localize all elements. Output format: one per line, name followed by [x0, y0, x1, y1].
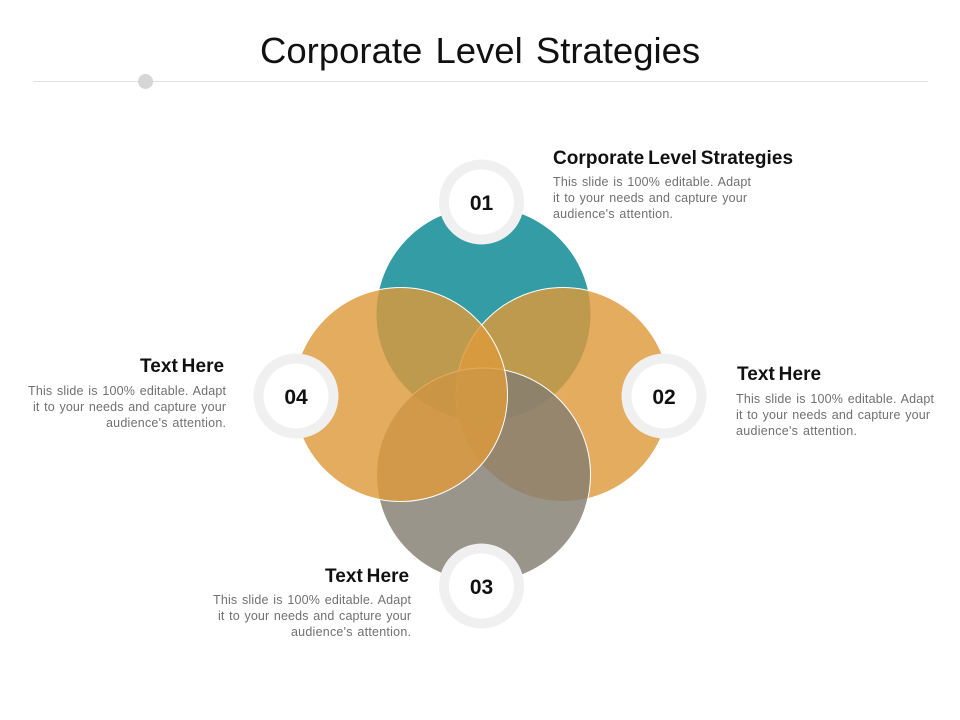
- text block 01: [553, 148, 793, 221]
- venn diagram: [294, 207, 670, 582]
- text block 01: it to your needs and capture your: [553, 191, 747, 205]
- circle: top teal: [376, 207, 590, 421]
- text block 01: This slide is 100% editable. Adapt: [553, 175, 752, 189]
- badge 03: [439, 544, 524, 628]
- text block 01: Corporate Level Strategies: [553, 148, 793, 169]
- badge 03: 03: [470, 576, 493, 599]
- text block 03: audience's attention.: [291, 625, 411, 639]
- text block 02: it to your needs and capture your: [736, 408, 930, 422]
- circle: bottom grey: [376, 368, 590, 582]
- circle: right orange: [456, 288, 670, 502]
- text block 04: [28, 356, 227, 430]
- badge 01: [439, 160, 524, 244]
- text block 04: audience's attention.: [106, 416, 226, 430]
- badge 01: 01: [470, 192, 493, 215]
- text block 03: [213, 566, 412, 639]
- text block 02: audience's attention.: [736, 424, 857, 438]
- text block 03: it to your needs and capture your: [218, 609, 411, 623]
- text block 03: This slide is 100% editable. Adapt: [213, 593, 412, 607]
- text block 03: Text Here: [325, 566, 409, 587]
- text block 02: [736, 364, 935, 438]
- text block 02: Text Here: [737, 364, 821, 385]
- badge 04: [254, 354, 338, 438]
- badge 04: 04: [284, 386, 308, 409]
- badge 02: [622, 354, 706, 438]
- circle: left orange: [294, 288, 508, 502]
- text block 04: Text Here: [140, 356, 224, 377]
- title rule with dot: [33, 74, 928, 89]
- title: Corporate Level Strategies: [260, 30, 700, 71]
- text block 02: This slide is 100% editable. Adapt: [736, 392, 935, 406]
- text block 04: This slide is 100% editable. Adapt: [28, 384, 227, 398]
- text block 04: it to your needs and capture your: [33, 400, 226, 414]
- text block 01: audience's attention.: [553, 207, 673, 221]
- badge 02: 02: [652, 386, 676, 409]
